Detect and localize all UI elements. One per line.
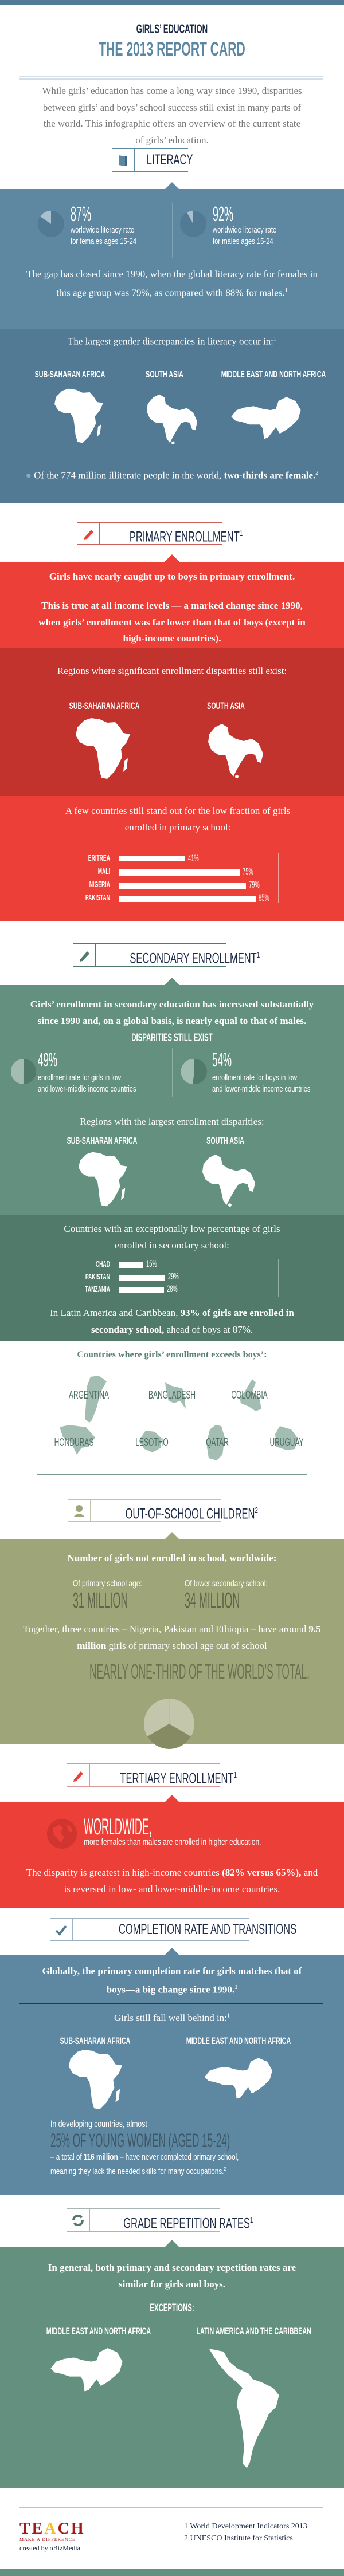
panel: tertiary: The disparity is greatest in high-income countries (82% versus 65%), and is reversed in low- and lower-middle-income countries. (26, 1867, 318, 1894)
panel: out-of-school: NEARLY ONE-THIRD OF THE WORLD’S TOTAL. (89, 1660, 310, 1683)
header: literacy (112, 148, 188, 172)
stat: female literacy (38, 202, 136, 246)
stat: female literacy: for females ages 15-24 (71, 237, 136, 246)
logo: teach: MAKE A DIFFERENCE (19, 2537, 76, 2542)
stat: primary age (73, 1579, 142, 1613)
header: secondary enrollment (73, 943, 226, 967)
bar chart: primary (85, 853, 279, 903)
panel: literacy regions: The largest gender discrepancies in literacy occur in:1 (68, 336, 276, 347)
header: completion (50, 1918, 249, 1941)
icon: pencil (77, 523, 100, 544)
stat: boys secondary (181, 1049, 311, 1094)
text: illiterate: ● Of the 774 million illiterate people in the world, two-thirds are female.2 (26, 470, 318, 481)
panel: literacy regions: SOUTH ASIA (146, 369, 183, 380)
stat: boys secondary: enrollment rate for boys in low (212, 1073, 297, 1082)
panel: secondary enrollment: Girls’ enrollment in secondary education has increased substantially since 1990 and, on a global basis, is nearly equal to that of males. (30, 999, 314, 1026)
panel: primary regions: Regions where significant enrollment disparities still exist: (57, 665, 287, 676)
header: out-of-school: OUT-OF-SCHOOL CHILDREN2 (126, 1506, 258, 1522)
panel: primary enrollment: This is true at all income levels — a marked change since 1990, when girls’ enrollment was far lower than that of boys (except in high-income countries). (38, 600, 306, 644)
bar chart: secondary: 29% (168, 1271, 179, 1282)
icon: book (112, 149, 135, 171)
header: primary enrollment: PRIMARY ENROLLMENT1 (130, 529, 243, 545)
map: middle east (205, 2058, 272, 2098)
header: out-of-school (68, 1499, 221, 1522)
panel: grade repetition: LATIN AMERICA AND THE CARIBBEAN (196, 2326, 311, 2337)
stat: male literacy: worldwide literacy rate (213, 225, 276, 235)
panel: secondary countries: Countries with an exceptionally low percentage of girls enrolled in secondary school: (64, 1223, 280, 1251)
map: latin america (209, 2349, 279, 2468)
bar chart: primary: 85% (259, 892, 269, 903)
panel: completion: MIDDLE EAST AND NORTH AFRICA (186, 2035, 291, 2046)
header: primary enrollment (77, 522, 222, 545)
header: secondary enrollment: SECONDARY ENROLLMENT1 (130, 950, 260, 966)
map: middle east (232, 397, 300, 439)
icon: pencil (67, 1764, 90, 1786)
map: sub-saharan africa (54, 388, 103, 443)
panel: secondary enrollment (0, 985, 344, 1215)
bar chart: primary: MALI (98, 866, 110, 876)
icon: person (68, 1500, 91, 1521)
panel: primary enrollment (0, 562, 344, 649)
icon: check (50, 1919, 73, 1940)
panel: tertiary (0, 1802, 344, 1908)
stat: lower secondary: Of lower secondary school: (185, 1579, 268, 1589)
map: sub-saharan africa (69, 2050, 123, 2110)
panel: tertiary: more females than males are enrolled in higher education. (84, 1837, 261, 1847)
panel: completion: Globally, the primary completion rate for girls matches that of boys—a big change since 1990.1 (42, 1966, 302, 1995)
panel: out-of-school (0, 1539, 344, 1744)
country shapes: LESOTHO (135, 1436, 169, 1449)
country shapes: QATAR (206, 1436, 229, 1449)
logo: teach (19, 2520, 85, 2552)
country shapes: COLOMBIA (231, 1389, 268, 1401)
map: sub-saharan africa (79, 1152, 127, 1206)
stat: male literacy: for males ages 15-24 (213, 237, 273, 246)
map: sub-saharan africa (76, 718, 130, 779)
title block: GIRLS’ EDUCATION (136, 22, 208, 36)
panel: literacy (0, 189, 344, 329)
panel: tertiary: WORLDWIDE, (84, 1814, 152, 1840)
stat: young women: In developing countries, almost (50, 2118, 147, 2129)
panel: completion (0, 1955, 344, 2195)
map: south asia (202, 1155, 256, 1207)
panel: primary enrollment: Girls have nearly caught up to boys in primary enrollment. (49, 571, 295, 582)
stat: girls secondary: enrollment rate for girls in low (38, 1073, 121, 1082)
bar chart: primary: 41% (188, 853, 199, 864)
panel: completion: Girls still fall well behind in:1 (114, 2012, 230, 2023)
map: south asia (208, 724, 263, 778)
top bar (0, 0, 344, 5)
bar chart: secondary: PAKISTAN (85, 1272, 110, 1282)
title block: THE 2013 REPORT CARD (99, 38, 245, 60)
intro text: While girls’ education has come a long way since 1990, disparities between girls’ and boys’ school success still exist in many parts of the world. This infographic offers an overview of the current state of girls’ education. (42, 85, 302, 145)
map: south asia (147, 394, 197, 444)
footnotes: 2 UNESCO Institute for Statistics (184, 2534, 293, 2543)
country shapes (54, 1376, 304, 1460)
header: completion: COMPLETION RATE AND TRANSITIONS (119, 1921, 296, 1937)
stat: young women: – a total of 116 million – have never completed primary school, (50, 2152, 239, 2162)
title block (99, 22, 245, 60)
panel: grade repetition (0, 2247, 344, 2488)
panel: secondary countries: In Latin America and Caribbean, 93% of girls are enrolled in secondary school, ahead of boys at 87%. (50, 1307, 294, 1334)
panel: out-of-school: Number of girls not enrolled in school, worldwide: (68, 1553, 276, 1563)
footnotes (184, 2522, 307, 2543)
bar chart: primary: 75% (243, 866, 253, 877)
panel: grade repetition: MIDDLE EAST AND NORTH AFRICA (46, 2326, 151, 2337)
header: grade repetition: GRADE REPETITION RATES1 (123, 2215, 253, 2231)
footnotes: 1 World Development Indicators 2013 (184, 2522, 307, 2531)
bar chart: primary: PAKISTAN (85, 893, 110, 903)
panel: secondary enrollment: DISPARITIES STILL EXIST (131, 1032, 213, 1044)
bottom bar (0, 2569, 344, 2576)
stat: boys secondary: and lower-middle income countries (212, 1084, 311, 1094)
panel: secondary countries (0, 1215, 344, 1341)
bar chart: secondary: CHAD (96, 1259, 110, 1269)
header: tertiary (67, 1763, 220, 1787)
stat: girls secondary: and lower-middle income countries (38, 1084, 136, 1094)
panel: grade repetition: EXCEPTIONS: (150, 2302, 194, 2314)
stat: young women: meaning they lack the needed skills for many occupations.2 (50, 2166, 226, 2176)
header: tertiary: TERTIARY ENROLLMENT1 (120, 1770, 237, 1786)
panel: secondary enrollment: Regions with the largest enrollment disparities: (80, 1116, 264, 1127)
stat: male literacy (180, 202, 276, 246)
stat: young women: 25% OF YOUNG WOMEN (AGED 15-24) (50, 2130, 230, 2152)
icon: pencil (73, 944, 96, 966)
stat: primary age: Of primary school age: (73, 1579, 142, 1589)
country shapes: BANGLADESH (148, 1389, 196, 1401)
bar chart: secondary: 28% (167, 1283, 178, 1294)
icon: cycle (67, 2209, 90, 2231)
header: grade repetition (67, 2208, 220, 2232)
text: gap closed: The gap has closed since 1990, when the global literacy rate for females in this age group was 79%, as compared with 88% for males.1 (26, 269, 318, 298)
icon: globe (47, 1819, 77, 1849)
bar chart: primary: NIGERIA (89, 880, 110, 889)
pie: one third (144, 1699, 194, 1749)
panel: primary regions (0, 648, 344, 796)
stat: girls secondary (11, 1049, 136, 1094)
panel: literacy regions: SUB-SAHARAN AFRICA (35, 369, 105, 380)
panel: literacy regions: MIDDLE EAST AND NORTH AFRICA (221, 369, 326, 380)
logo: teach: TEACH (19, 2520, 85, 2538)
stat: boys secondary: 54% (212, 1049, 232, 1071)
stat: girls secondary: 49% (38, 1049, 57, 1071)
panel: primary regions: SOUTH ASIA (207, 700, 245, 711)
panel: grade repetition: In general, both primary and secondary repetition rates are similar for girls and boys. (48, 2262, 296, 2290)
stat: female literacy: worldwide literacy rate (71, 225, 134, 235)
map: middle east (50, 2348, 123, 2392)
panel: primary countries (0, 796, 344, 921)
logo: teach: created by oBizMedia (19, 2544, 80, 2552)
stat: lower secondary (185, 1579, 268, 1613)
country shapes: HONDURAS (54, 1436, 93, 1449)
stat: female literacy: 87% (71, 202, 91, 226)
country shapes: ARGENTINA (69, 1389, 109, 1401)
stat: male literacy: 92% (213, 202, 233, 226)
stat: young women (50, 2118, 239, 2176)
panel: primary countries: A few countries still stand out for the low fraction of girls enrolled in primary school: (65, 805, 290, 833)
bar chart: secondary: 15% (146, 1258, 157, 1269)
bar chart: secondary: TANZANIA (85, 1285, 110, 1294)
header: literacy: LITERACY (147, 152, 193, 168)
bar chart: secondary (85, 1258, 279, 1297)
panel: out-of-school: Together, three countries – Nigeria, Pakistan and Ethiopia – have around 9.5 million girls of primary school age out of school (23, 1624, 321, 1651)
bar chart: primary: ERITREA (88, 853, 110, 863)
panel: completion: SUB-SAHARAN AFRICA (60, 2035, 130, 2046)
panel: secondary enrollment: SOUTH ASIA (206, 1135, 244, 1146)
stat: primary age: 31 MILLION (73, 1589, 128, 1613)
panel: secondary enrollment: SUB-SAHARAN AFRICA (67, 1135, 137, 1146)
panel: primary regions: SUB-SAHARAN AFRICA (69, 700, 139, 711)
country shapes: URUGUAY (269, 1436, 304, 1449)
panel: literacy regions (0, 329, 344, 503)
text: girls exceed boys: Countries where girls’ enrollment exceeds boys’: (77, 1350, 267, 1360)
stat: lower secondary: 34 MILLION (185, 1589, 240, 1613)
bar chart: primary: 79% (249, 879, 260, 890)
